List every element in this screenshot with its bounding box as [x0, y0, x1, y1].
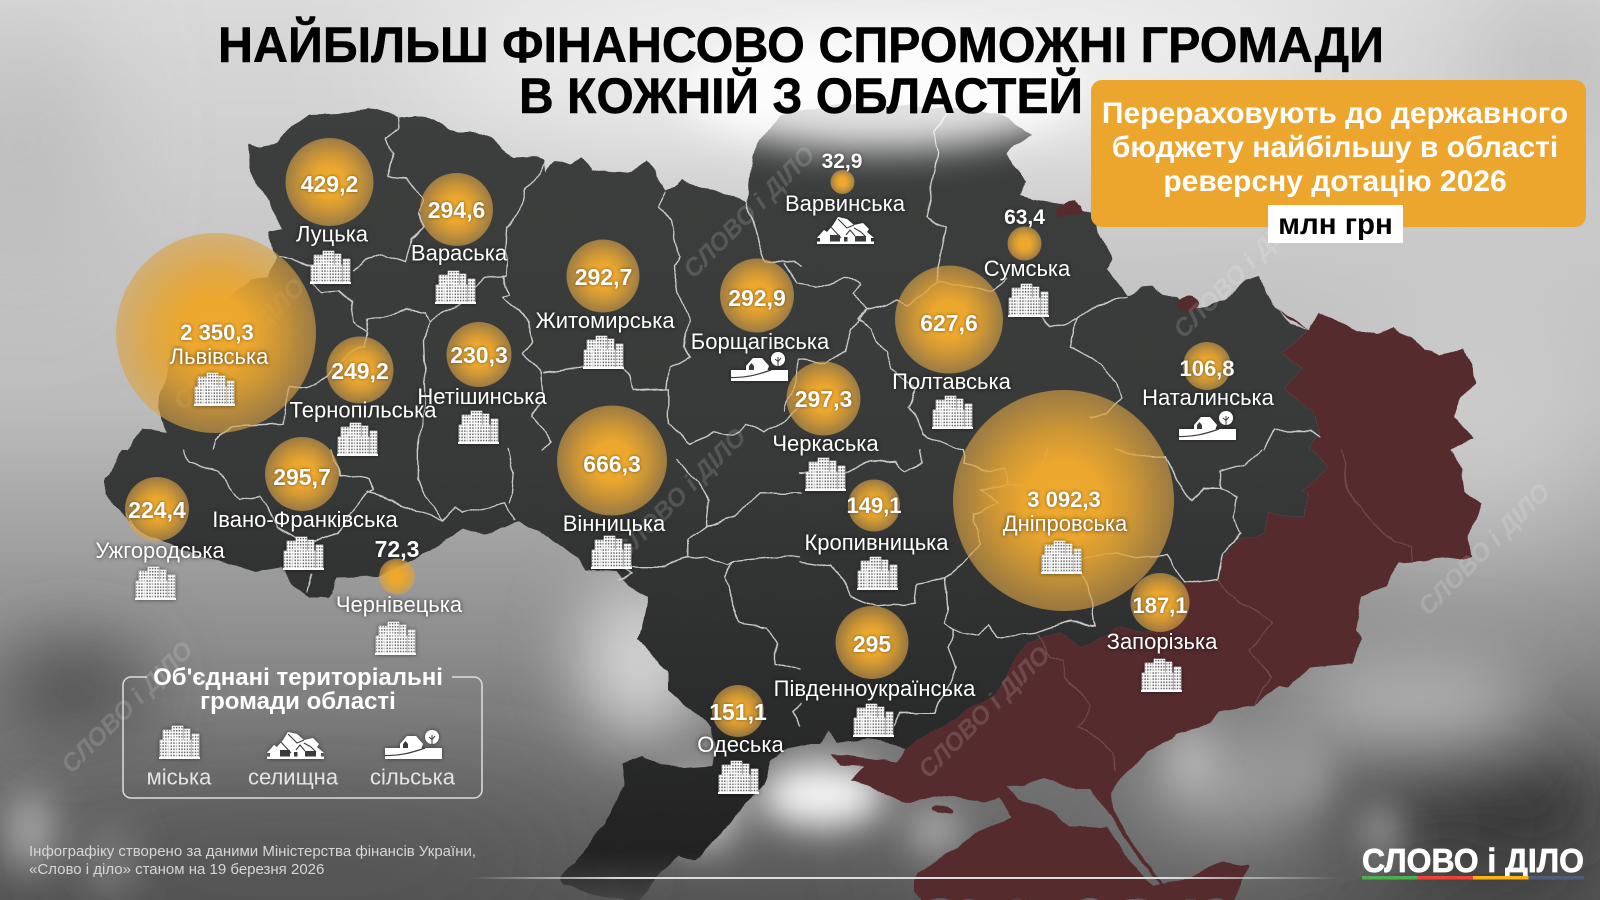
marker: Вінницька: Вінницька	[563, 511, 666, 536]
marker: Полтавська: Полтавська	[892, 369, 1012, 394]
marker: Тернопільська	[290, 336, 437, 456]
marker: Івано-Франківська	[212, 437, 399, 570]
panel: reverse subsidy note: млн грн	[1278, 208, 1393, 241]
panel: reverse subsidy note: Перераховують до державного	[1102, 97, 1568, 130]
marker: Борщагівська	[691, 258, 830, 381]
watermarks: СЛОВО і ДІЛО	[168, 273, 311, 416]
marker: Одеська: 151,1	[709, 699, 767, 725]
watermarks: СЛОВО і ДІЛО	[678, 141, 821, 284]
marker: Одеська	[697, 685, 785, 794]
marker: Варвинська	[785, 150, 906, 244]
panel: reverse subsidy note: бюджету найбільшу в області	[1112, 131, 1558, 164]
watermarks	[56, 141, 1556, 784]
logo: СЛОВО і ДІЛО	[1362, 842, 1584, 879]
marker: Нетішинська: Нетішинська	[417, 384, 547, 409]
marker: Сумська: 63,4	[1004, 206, 1045, 229]
marker: Тернопільська: Тернопільська	[290, 398, 437, 422]
map of Ukraine	[105, 105, 1481, 900]
marker: Вараська: 294,6	[428, 197, 485, 223]
marker: Борщагівська: Борщагівська	[691, 329, 830, 354]
legend: селищна	[248, 764, 339, 790]
legend: Об'єднані територіальні	[153, 664, 443, 691]
marker: Запорізька: Запорізька	[1107, 629, 1218, 654]
marker: Львівська: 2 350,3	[180, 320, 254, 345]
marker: Дніпровська: Дніпровська	[1003, 511, 1128, 536]
marker: Борщагівська: 292,9	[728, 285, 786, 311]
marker: Ужгородська: Ужгородська	[95, 538, 225, 563]
legend: громади області	[200, 688, 396, 715]
marker: Житомирська: 292,7	[575, 264, 632, 290]
marker: Наталинська: Наталинська	[1142, 385, 1275, 410]
title	[218, 16, 1384, 124]
highlight over northern border	[680, 34, 1080, 150]
marker: Вінницька: 666,3	[583, 451, 641, 477]
marker: Південноукраїнська	[774, 606, 976, 737]
marker: Кропивницька: Кропивницька	[804, 530, 949, 555]
marker: Полтавська	[892, 266, 1012, 429]
marker: Чернівецька	[336, 536, 463, 655]
legend: міська	[147, 764, 212, 790]
marker: Кропивницька	[804, 480, 949, 590]
marker: Ужгородська	[95, 477, 225, 600]
footer rule	[470, 877, 1340, 879]
marker: Південноукраїнська: 295	[853, 631, 891, 657]
marker: Чернівецька: Чернівецька	[336, 592, 463, 617]
marker: Одеська: Одеська	[697, 732, 785, 757]
marker: Дніпровська	[953, 390, 1174, 611]
source note: «Слово і діло» станом на 19 березня 2026	[29, 861, 324, 878]
marker: Варвинська: Варвинська	[785, 191, 906, 216]
marker: Нетішинська	[417, 322, 547, 444]
title: В КОЖНІЙ З ОБЛАСТЕЙ	[519, 67, 1083, 124]
panel: reverse subsidy note: реверсну дотацію 2026	[1163, 165, 1507, 198]
marker: Тернопільська: 249,2	[331, 358, 389, 384]
watermarks: СЛОВО і ДІЛО	[56, 636, 199, 779]
marker: Луцька: 429,2	[301, 171, 358, 197]
marker: Варвинська: 32,9	[822, 150, 862, 173]
marker: Кропивницька: 149,1	[846, 493, 902, 518]
marker: Житомирська	[535, 240, 675, 369]
marker: Запорізька: 187,1	[1132, 593, 1188, 618]
marker: Житомирська: Житомирська	[535, 308, 675, 333]
marker: Івано-Франківська: 295,7	[273, 464, 331, 490]
marker: Луцька: Луцька	[296, 222, 369, 246]
marker: Чернівецька: 72,3	[375, 536, 419, 562]
marker: Ужгородська: 224,4	[128, 497, 186, 523]
panel: reverse subsidy note	[1091, 80, 1586, 243]
marker: Наталинська: 106,8	[1179, 356, 1235, 381]
watermarks: СЛОВО і ДІЛО	[1413, 478, 1556, 621]
marker: Сумська	[984, 206, 1071, 317]
watermarks: СЛОВО і ДІЛО	[913, 641, 1056, 784]
marker: Нетішинська: 230,3	[450, 342, 508, 368]
source note: Інфографіку створено за даними Міністерства фінансів України,	[29, 843, 476, 860]
marker: Наталинська	[1142, 342, 1275, 440]
marker: Сумська: Сумська	[984, 256, 1071, 281]
marker: Запорізька	[1107, 573, 1218, 692]
marker: Черкаська: 297,3	[795, 386, 852, 412]
marker: Вінницька	[557, 406, 667, 569]
marker: Полтавська: 627,6	[920, 310, 978, 336]
map: occupied territories	[830, 200, 1481, 900]
marker: Черкаська: Черкаська	[772, 431, 879, 456]
marker: Вараська: Вараська	[411, 240, 508, 266]
marker: Луцька	[286, 138, 374, 284]
legend: сільська	[370, 764, 456, 790]
marker: Черкаська	[772, 362, 879, 491]
marker: Львівська: Львівська	[170, 344, 269, 369]
title: НАЙБІЛЬШ ФІНАНСОВО СПРОМОЖНІ ГРОМАДИ	[218, 16, 1384, 73]
watermarks: СЛОВО і ДІЛО	[609, 423, 752, 566]
marker: Івано-Франківська: Івано-Франківська	[212, 507, 399, 532]
map: free territory	[105, 105, 1328, 900]
map: oblast borders	[128, 115, 1412, 770]
marker: Львівська	[116, 233, 316, 433]
watermarks: СЛОВО і ДІЛО	[1168, 201, 1311, 344]
legend	[123, 664, 482, 798]
marker: Південноукраїнська: Південноукраїнська	[774, 676, 976, 701]
marker: Дніпровська: 3 092,3	[1027, 487, 1101, 512]
source note	[29, 843, 476, 878]
marker: Вараська	[411, 173, 508, 304]
